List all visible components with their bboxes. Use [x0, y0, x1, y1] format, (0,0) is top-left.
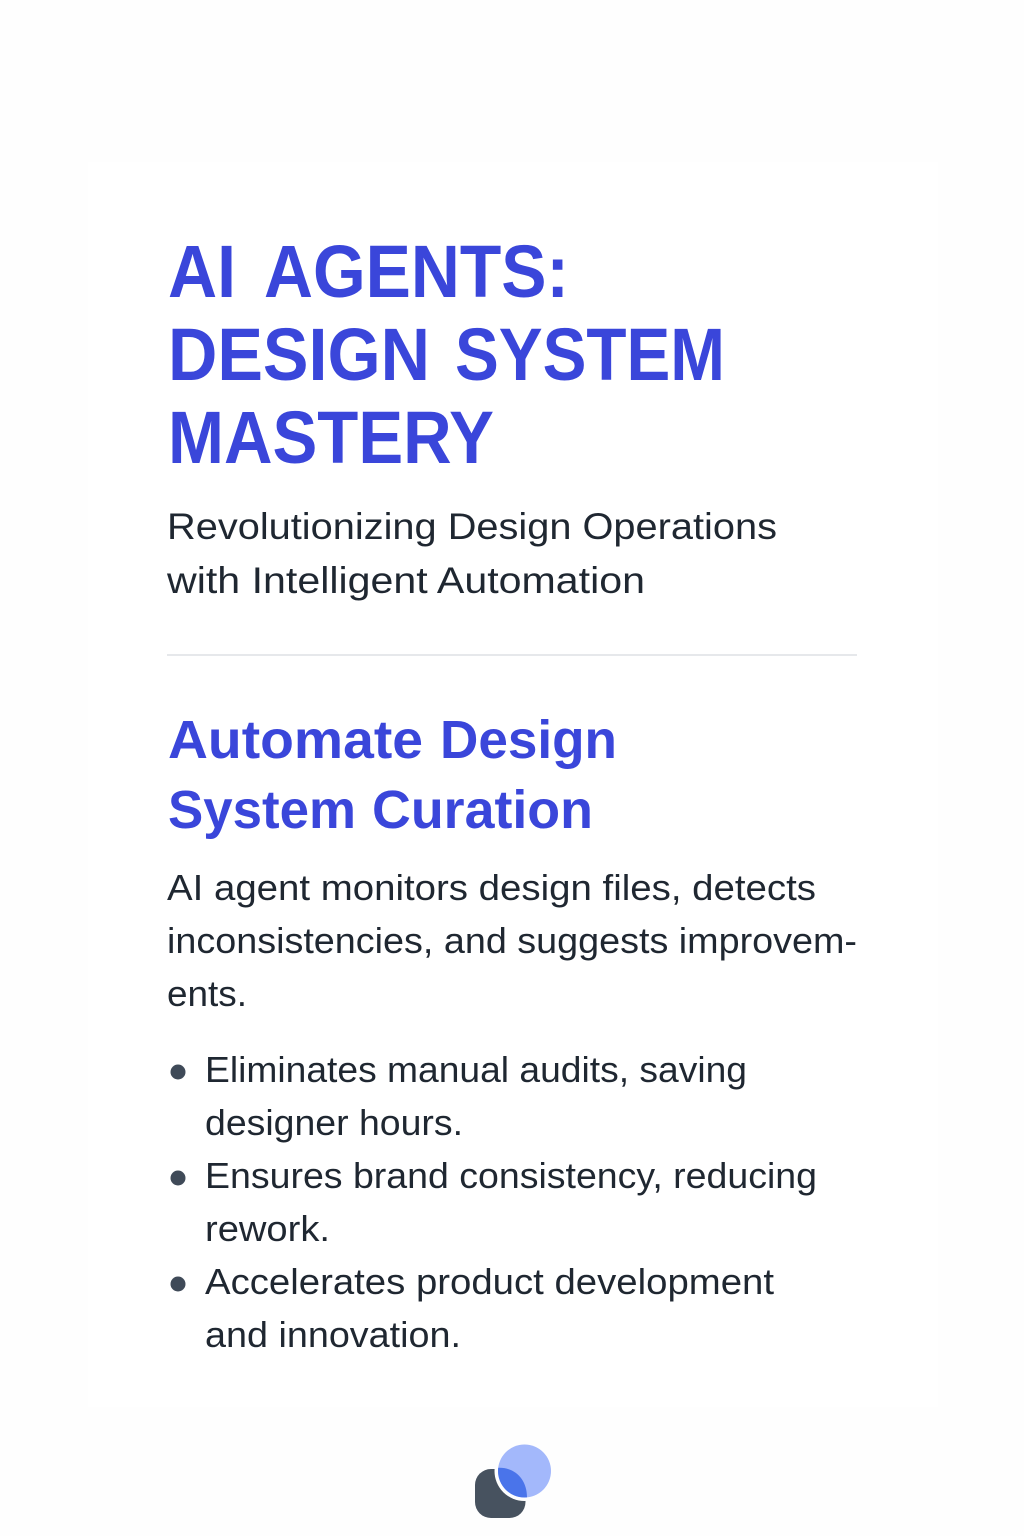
title: DESIGN [168, 313, 430, 396]
body paragraph: ents. [167, 973, 247, 1014]
bullet 3: and innovation. [205, 1314, 461, 1355]
bullet 1: Eliminates manual audits, saving [205, 1049, 747, 1090]
bullet 1 [170, 1049, 747, 1143]
body paragraph: inconsistencies, and suggests improvem- [167, 920, 857, 961]
icon: overlapping logo mark [470, 1444, 551, 1520]
bullet 2 [170, 1155, 817, 1249]
bullet list [170, 1049, 817, 1355]
section heading: Curation [372, 780, 593, 840]
panel: content card [88, 162, 938, 1407]
title [168, 230, 725, 479]
body paragraph: AI agent monitors design files, detects [167, 867, 816, 908]
bullet 3: Accelerates product development [205, 1261, 774, 1302]
body paragraph [167, 867, 857, 1014]
bullet 3 [170, 1261, 774, 1355]
title: AI [168, 230, 236, 313]
title: MASTERY [168, 396, 494, 479]
subtitle: Revolutionizing Design Operations [167, 506, 777, 547]
section heading: Design [440, 710, 617, 770]
section heading: Automate [168, 710, 423, 770]
bullet 2: rework. [205, 1208, 330, 1249]
section heading: System [168, 780, 356, 840]
subtitle [166, 506, 777, 601]
subtitle: with Intelligent Automation [166, 560, 645, 601]
bullet 1: designer hours. [205, 1102, 463, 1143]
title: AGENTS: [264, 230, 569, 313]
section heading [168, 710, 617, 840]
title: SYSTEM [455, 313, 725, 396]
bullet 2: Ensures brand consistency, reducing [205, 1155, 817, 1196]
